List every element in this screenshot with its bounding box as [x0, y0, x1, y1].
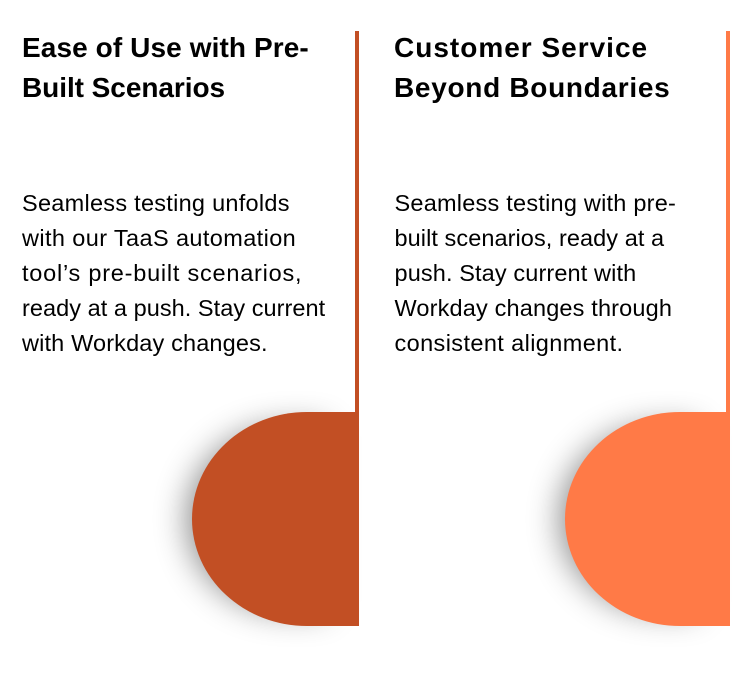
panel: ease of use	[22, 31, 359, 634]
text block: ease of use description	[22, 190, 325, 356]
heading: ease of use: Ease of Use with Pre-	[22, 32, 309, 63]
semicircle tab: rust	[192, 412, 358, 626]
heading: customer service	[394, 32, 670, 103]
text block: customer service description: push. Stay current with	[394, 260, 636, 286]
text block: ease of use description: Seamless testing unfolds	[22, 190, 290, 216]
text block: ease of use description: ready at a push. Stay current	[22, 295, 325, 321]
vertical rule: orange	[726, 31, 730, 626]
panel: customer service	[394, 31, 730, 634]
heading: ease of use: Built Scenarios	[22, 72, 225, 103]
text block: customer service description: Workday changes through	[394, 295, 672, 321]
text block: customer service description: Seamless testing with pre-	[394, 190, 676, 216]
semicircle tab: orange	[565, 412, 730, 626]
vertical rule: rust	[354, 31, 358, 626]
text block: ease of use description: with Workday changes.	[22, 330, 268, 356]
text block: ease of use description: with our TaaS automation	[22, 225, 296, 251]
text block: customer service description: consistent alignment.	[394, 330, 623, 356]
heading: customer service: Customer Service	[394, 32, 648, 63]
heading: ease of use	[22, 32, 309, 103]
text block: ease of use description: tool’s pre-built scenarios,	[22, 260, 302, 286]
text block: customer service description: built scenarios, ready at a	[394, 225, 664, 251]
text block: customer service description	[394, 190, 676, 356]
heading: customer service: Beyond Boundaries	[394, 72, 670, 103]
